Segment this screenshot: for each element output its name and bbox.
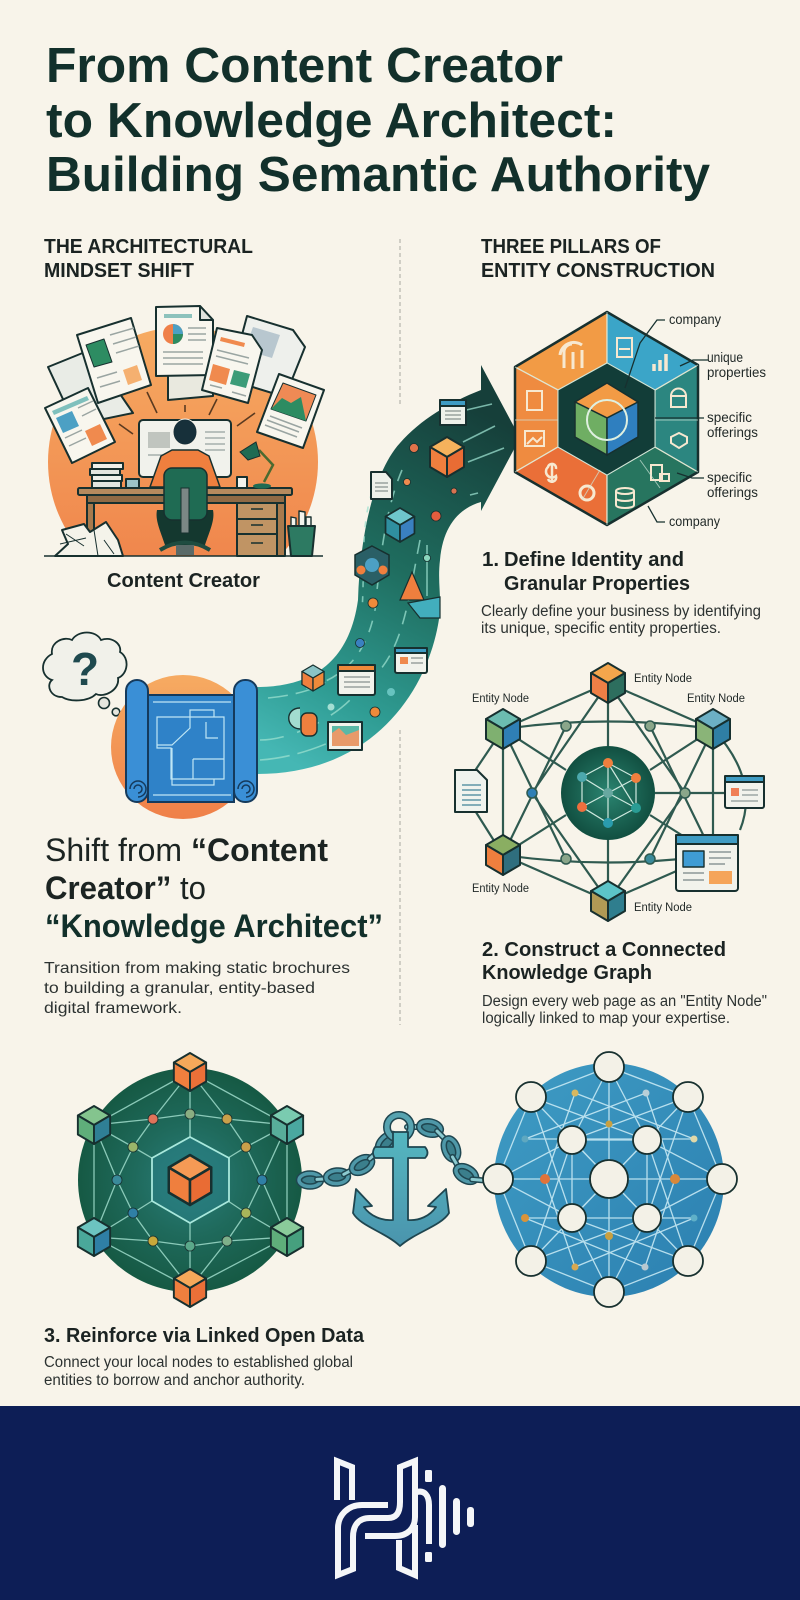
shift statement <box>45 832 383 944</box>
hexagon outline <box>515 312 698 525</box>
graph connections <box>462 683 746 901</box>
pillar 1 heading: Granular Properties <box>504 572 690 595</box>
ribbon window icon 3 <box>395 648 427 673</box>
hexagon inner ring <box>558 363 655 475</box>
footer band <box>0 1406 800 1600</box>
pillar 3 heading: 3. Reinforce via Linked Open Data <box>44 1324 365 1347</box>
central hub <box>561 746 655 840</box>
ground line <box>44 555 323 557</box>
title <box>46 39 710 202</box>
ribbon blue cube <box>386 508 414 542</box>
crumpled papers <box>55 522 123 556</box>
ribbon picture icon <box>328 722 362 750</box>
pillar 1 heading <box>482 548 690 595</box>
heading: architectural mindset shift: MINDSET SHIFT <box>44 260 194 282</box>
hexagon segment icons <box>525 338 687 508</box>
books and cups <box>90 463 247 488</box>
shift statement: Shift from “Content <box>45 832 328 868</box>
pillar 1 text <box>481 603 761 637</box>
anchor ring <box>387 1115 411 1139</box>
entity node labels: Entity Node <box>634 902 692 914</box>
ribbon split shape <box>289 708 317 736</box>
heading: three pillars: THREE PILLARS OF <box>481 236 661 258</box>
global knowledge sphere <box>494 1052 737 1307</box>
desk <box>78 488 292 556</box>
graph minor nodes <box>527 721 690 864</box>
anchor body <box>353 1132 449 1246</box>
ribbon window icon 2 <box>338 665 375 695</box>
entity cubes <box>486 663 730 921</box>
small web page icon <box>725 776 764 808</box>
illustration: content creator at desk <box>44 305 325 557</box>
local knowledge sphere <box>78 1053 303 1307</box>
global entity nodes <box>516 1052 737 1307</box>
paper: pie chart <box>156 306 213 376</box>
sphere minor nodes <box>112 1109 267 1251</box>
paper: green block <box>77 318 151 403</box>
pillar 2 text: logically linked to map your expertise. <box>482 1010 730 1027</box>
large web page icon <box>676 835 738 891</box>
pillar 2 heading: Knowledge Graph <box>482 961 652 984</box>
hexagon callout leaders <box>625 320 708 522</box>
ribbon hex node <box>355 546 389 585</box>
pillar 2 heading <box>482 938 726 984</box>
spark lines <box>119 392 255 434</box>
heading: architectural mindset shift: THE ARCHITECTURAL <box>44 236 253 258</box>
pillar 2 heading: 2. Construct a Connected <box>482 938 726 961</box>
monitor <box>139 420 231 477</box>
title: Building Semantic Authority <box>46 148 710 202</box>
footer logo <box>337 1461 474 1575</box>
heading: three pillars: ENTITY CONSTRUCTION <box>481 260 715 282</box>
desk lamp <box>240 442 273 489</box>
entity node labels: Entity Node <box>472 883 529 895</box>
hexagon diagram <box>515 312 698 525</box>
column divider <box>399 239 401 1025</box>
hexagon callout labels: company <box>669 311 721 327</box>
entity node labels: Entity Node <box>472 693 529 705</box>
pillar 3 text <box>44 1354 353 1389</box>
shift description <box>44 960 350 1017</box>
ribbon window icon <box>440 400 466 425</box>
thought bubble: ? <box>71 643 99 695</box>
chain and anchor <box>299 1115 513 1246</box>
paper: landscape picture <box>257 374 324 448</box>
pillar 1 text: its unique, specific entity properties. <box>481 620 721 637</box>
hexagon callout labels: company <box>669 513 720 529</box>
entity node labels: Entity Node <box>687 693 745 705</box>
sphere cubes <box>78 1053 303 1307</box>
shift description: Transition from making static brochures <box>44 960 350 977</box>
floor plan <box>153 702 231 795</box>
heading: architectural mindset shift <box>44 236 253 282</box>
blueprint scroll <box>111 675 257 819</box>
ribbon flow lines <box>260 404 504 760</box>
shift statement: Creator” to <box>45 870 206 906</box>
pillar 3 text: entities to borrow and anchor authority. <box>44 1372 305 1389</box>
hexagon callout labels: unique <box>707 349 743 365</box>
sphere connection lines <box>94 1072 287 1288</box>
hexagon callout labels: specific <box>707 409 752 425</box>
document icon <box>455 770 487 812</box>
pillar 2 text: Design every web page as an "Entity Node" <box>482 993 767 1010</box>
person seated <box>150 419 220 555</box>
thought bubble <box>43 632 127 716</box>
chain links <box>299 1119 486 1186</box>
heading: three pillars <box>481 236 715 282</box>
label: content creator: Content Creator <box>107 570 260 592</box>
pen bin <box>288 511 315 556</box>
ribbon orange shape <box>400 572 440 618</box>
hexagon center cube <box>575 383 638 455</box>
entity node labels: Entity Node <box>634 673 692 685</box>
global connection lines <box>498 1067 722 1292</box>
pillar 1 text: Clearly define your business by identifying <box>481 603 761 620</box>
hexagon callout labels: specific <box>707 469 752 485</box>
hexagon callout labels: properties <box>707 364 766 380</box>
shift statement: “Knowledge Architect” <box>45 908 383 944</box>
shift description: digital framework. <box>44 1000 182 1017</box>
ribbon small cube <box>302 665 324 691</box>
chain end node <box>483 1164 513 1194</box>
hexagon callout labels: offerings <box>707 424 758 440</box>
entity node labels <box>472 673 745 914</box>
ribbon arrow <box>257 365 520 774</box>
pillar 1 heading: Define Identity and <box>504 548 684 571</box>
knowledge graph <box>455 663 764 921</box>
title: From Content Creator <box>46 39 563 93</box>
hexagon callout labels: offerings <box>707 484 758 500</box>
paper stack in back <box>48 316 305 425</box>
paper: blue block <box>45 388 115 463</box>
title: to Knowledge Architect: <box>46 94 617 148</box>
pillar 3 text: Connect your local nodes to established global <box>44 1354 353 1371</box>
ribbon colored dots <box>328 444 457 717</box>
ribbon doc icon <box>371 472 392 499</box>
paper: orange and green blocks <box>202 328 262 403</box>
global minor nodes <box>521 1090 698 1270</box>
hexagon callout labels <box>669 311 766 529</box>
shift description: to building a granular, entity-based <box>44 980 315 997</box>
pillar 1 heading: 1. <box>482 548 499 571</box>
pillar 2 text <box>482 993 767 1027</box>
ribbon orange cube <box>430 437 464 477</box>
